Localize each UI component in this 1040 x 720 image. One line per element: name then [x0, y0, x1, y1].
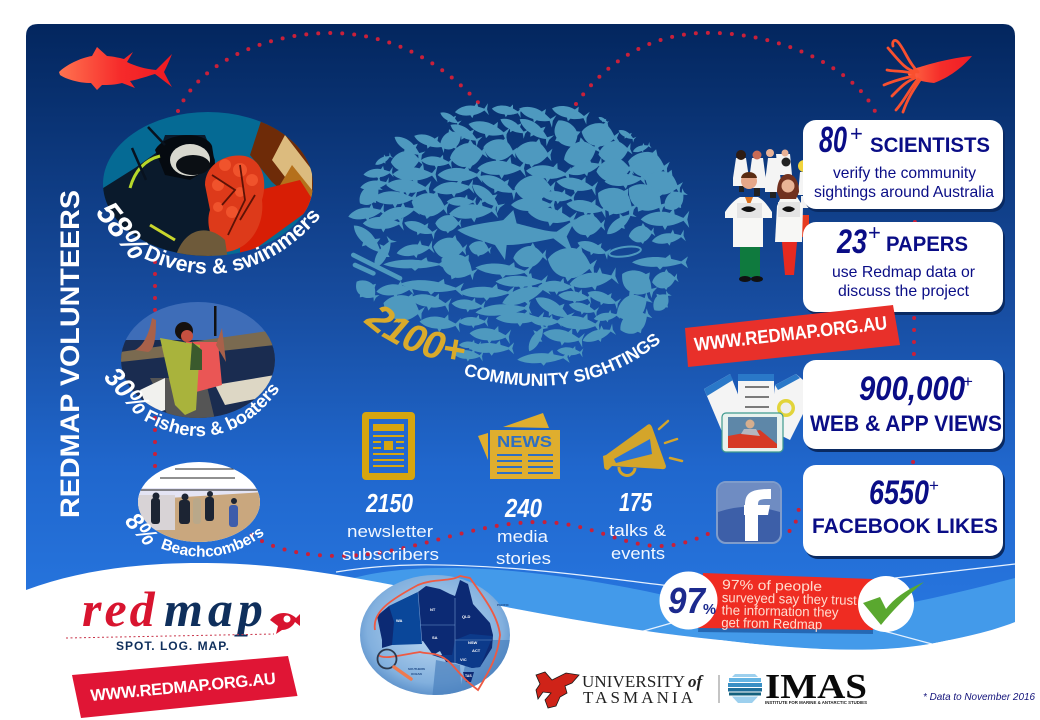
banner: website lower — [72, 656, 298, 718]
map: Australia globe: TAS — [465, 674, 472, 678]
card: web and app views: + — [963, 372, 973, 391]
banner: website — [685, 305, 900, 367]
logo: IMAS: IMAS — [765, 667, 867, 706]
card: papers: use Redmap data or — [832, 264, 976, 281]
icon: facebook — [717, 482, 781, 543]
icon: newspaper: NEWS — [497, 434, 552, 451]
stat block: talks and events — [603, 421, 682, 563]
map: Australia globe: NT — [430, 607, 436, 612]
photo: fishers and boaters — [120, 300, 276, 420]
stat block: newsletter: 2150 — [365, 488, 413, 518]
icon: red tuna — [59, 47, 172, 90]
card: facebook likes: + — [929, 476, 939, 495]
badge: 97 percent trust: get from Redmap — [721, 615, 822, 632]
stat: 30% fishers: 30% — [99, 361, 156, 421]
card: scientists: SCIENTISTS — [870, 133, 990, 157]
logo: redmap: SPOT. LOG. MAP. — [116, 639, 229, 653]
card: papers: + — [868, 220, 881, 245]
stat block: newsletter: subscribers — [342, 545, 439, 564]
icon: scientists group — [725, 149, 811, 282]
photo: divers and swimmers — [100, 110, 316, 260]
dotted migration routes — [155, 33, 915, 556]
logo: University of Tasmania: of — [688, 672, 704, 691]
card: papers: 23 — [836, 223, 867, 261]
stat: 8% beachcombers: 8% — [120, 507, 163, 551]
map: Australia globe: SA — [432, 635, 438, 640]
card: papers: PAPERS — [886, 232, 968, 256]
note: data date: * Data to November 2016 — [923, 691, 1035, 703]
icon: red squid — [884, 40, 972, 112]
card: web and app views — [803, 360, 1005, 452]
card: web and app views: 900,000 — [859, 370, 965, 408]
fish school: community sightings — [347, 100, 691, 367]
map: Australia globe: VIC — [460, 657, 467, 662]
map: Australia globe: SOUTHERN — [408, 667, 425, 671]
badge: 97 percent trust: 97 — [668, 580, 707, 621]
banner: website: WWW.REDMAP.ORG.AU — [693, 313, 888, 356]
map: Australia globe: NSW — [468, 640, 478, 645]
map: Australia globe: QLD — [462, 614, 471, 619]
card: facebook likes: FACEBOOK LIKES — [812, 515, 998, 538]
logo: University of Tasmania — [536, 672, 704, 708]
label: community sightings: COMMUNITY SIGHTINGS — [465, 334, 660, 386]
card: web and app views: WEB & APP VIEWS — [810, 411, 1002, 436]
map: Australia globe: OCEAN — [411, 672, 422, 676]
icon: newspaper — [478, 413, 560, 479]
stat block: newsletter — [342, 412, 439, 564]
icon: tablet newsletter — [362, 412, 415, 480]
map: Australia globe: ACT — [472, 648, 481, 653]
stat block: media stories: 240 — [504, 493, 542, 523]
stat block: talks and events: events — [611, 544, 665, 563]
stat block: media stories: media — [497, 527, 549, 546]
card: scientists: sightings around Australia — [814, 184, 994, 201]
stat: 58% divers: 58% — [89, 195, 157, 266]
card: scientists: verify the community — [833, 165, 976, 182]
badge: 97 percent trust: 97% of people — [722, 577, 822, 594]
card: scientists: 80 — [819, 119, 847, 160]
card: scientists — [803, 119, 1005, 212]
map: Australia globe: PACIFIC — [497, 603, 510, 607]
label: beachcombers: Beachcombers — [161, 529, 264, 557]
logo: University of Tasmania: TASMANIA — [583, 688, 694, 707]
logo: redmap — [66, 581, 300, 653]
stat block: talks and events: talks & — [609, 521, 667, 540]
badge: 97 percent trust: the information they — [721, 602, 839, 620]
card: scientists: + — [850, 121, 863, 146]
banner: website lower: WWW.REDMAP.ORG.AU — [90, 670, 277, 705]
stat: 2100+ sightings: 2100+ — [363, 306, 465, 360]
map: Australia globe — [360, 575, 515, 700]
logo: University of Tasmania: UNIVERSITY — [582, 672, 685, 691]
card: facebook likes — [803, 465, 1005, 559]
label: divers and swimmers: Divers & swimmers — [144, 210, 320, 274]
stat block: media stories — [478, 413, 560, 568]
logo: IMAS — [728, 667, 867, 706]
lower wave — [0, 563, 1015, 720]
logo: redmap: red — [82, 581, 158, 637]
badge: 97 percent trust: surveyed say they trust — [722, 590, 857, 608]
stat block: media stories: stories — [496, 549, 551, 568]
card: papers: discuss the project — [838, 283, 970, 300]
logo: IMAS: INSTITUTE FOR MARINE & ANTARCTIC STUDIES — [765, 700, 867, 705]
divider — [718, 675, 720, 703]
logo: redmap: map — [164, 581, 268, 637]
stat block: newsletter: newsletter — [347, 522, 433, 541]
icon: megaphone — [603, 421, 682, 476]
card: facebook likes: 6550 — [869, 474, 929, 512]
badge: 97 percent trust: % — [703, 601, 716, 618]
label: fishers and boaters: Fishers & boaters — [144, 384, 278, 436]
badge: 97 percent trust — [660, 572, 924, 634]
heading: Redmap volunteers: REDMAP VOLUNTEERS — [55, 190, 85, 518]
card: papers — [803, 220, 1005, 315]
stat block: talks and events: 175 — [619, 487, 652, 517]
icon: app screens — [704, 374, 815, 452]
photo: beachcombers — [138, 462, 260, 542]
map: Australia globe: WA — [396, 618, 403, 623]
